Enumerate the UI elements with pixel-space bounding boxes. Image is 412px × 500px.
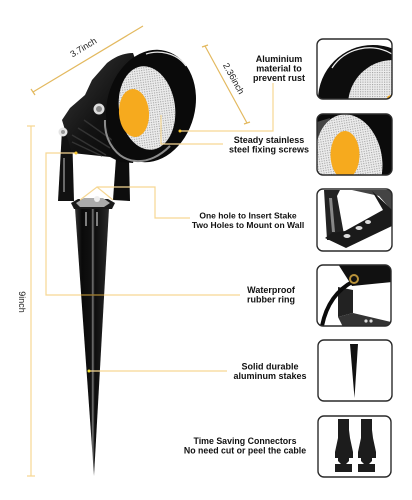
dimension: lamp depth 2.36 inch	[202, 45, 250, 124]
leader line: fixing screws	[161, 115, 223, 144]
label: stakes: Solid durable	[241, 362, 299, 372]
label: connectors: No need cut or peel the cable	[184, 446, 306, 456]
rear housing	[62, 53, 150, 163]
cooling fins	[72, 120, 112, 156]
label: fixing screws: Steady stainless	[234, 135, 304, 145]
leader line: rubber ring	[46, 152, 240, 295]
grey lower rim	[105, 120, 170, 161]
adjustment screw upper	[94, 104, 104, 114]
panel: aluminium shroud detail	[316, 38, 393, 100]
label: aluminium material: Aluminium	[256, 54, 302, 64]
leader line: mounting holes	[80, 187, 190, 218]
panel: stake detail	[318, 340, 392, 401]
label: aluminium material: material to	[256, 64, 302, 74]
label: mounting holes: One hole to Insert Stake	[199, 210, 297, 220]
label: aluminium material: prevent rust	[253, 73, 305, 83]
bracket right leg	[113, 158, 130, 201]
lamp shroud	[94, 40, 208, 172]
connector right	[358, 419, 376, 464]
panel: rubber ring detail	[317, 264, 392, 327]
stake slots	[86, 212, 97, 226]
reflector	[113, 63, 181, 153]
label: rubber ring: Waterproof	[247, 285, 295, 295]
bracket left leg	[58, 130, 74, 201]
dimension: lamp depth 2.36 inch: 2.36inch	[221, 61, 246, 96]
mounting plate	[71, 199, 115, 209]
dimension: total height 9 inch: 9inch	[17, 291, 27, 313]
ground stake	[75, 208, 109, 476]
label: fixing screws: steel fixing screws	[229, 145, 309, 155]
panel: bracket detail	[317, 189, 392, 251]
adjustment screw lower	[58, 128, 68, 136]
dimension: total height 9 inch	[17, 126, 35, 476]
panel: reflector and LED detail	[316, 113, 393, 176]
leader line: aluminium	[178, 83, 273, 132]
label: connectors: Time Saving Connectors	[194, 436, 296, 446]
label: rubber ring: rubber ring	[247, 295, 295, 305]
white upper rim highlight	[146, 52, 186, 66]
dimension: lamp width 3.7 inch: 3.7inch	[68, 36, 98, 59]
dimension: lamp width 3.7 inch	[31, 26, 143, 95]
label: mounting holes: Two Holes to Mount on Wall	[192, 220, 304, 230]
leader line: stake	[88, 370, 227, 372]
label: stakes: aluminum stakes	[233, 371, 307, 381]
illustration: spike light	[58, 40, 208, 476]
panel: connectors detail	[318, 416, 391, 477]
LED chip	[117, 88, 151, 138]
connector left	[335, 419, 353, 464]
